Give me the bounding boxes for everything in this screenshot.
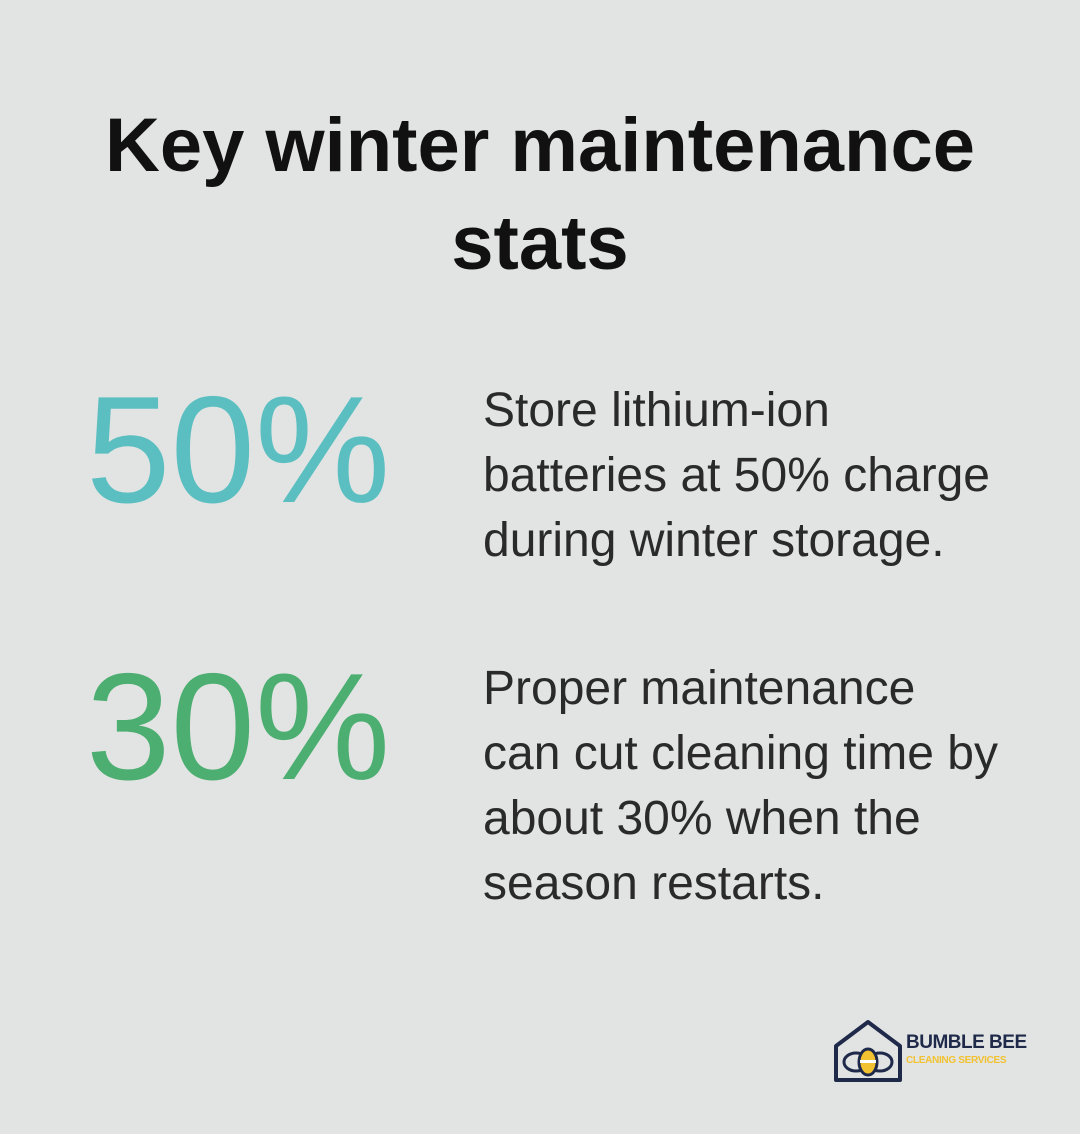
text: 50% description — [483, 384, 990, 567]
text: 30% description: Proper maintenance — [483, 662, 915, 715]
text: 50% description: during winter storage. — [483, 514, 945, 567]
text: 30% description: about 30% when the — [483, 792, 921, 845]
text: 50% description: batteries at 50% charge — [483, 449, 990, 502]
stat: 30%: 30% — [86, 642, 390, 812]
title: Key winter maintenance — [105, 103, 975, 188]
icon: bee house — [834, 1020, 902, 1082]
logo text: BUMBLE BEE — [906, 1032, 1027, 1053]
text: 50% description: Store lithium-ion — [483, 384, 830, 437]
logo: CLEANING SERVICES — [906, 1055, 1006, 1066]
text: 30% description — [483, 662, 998, 910]
text: 30% description: can cut cleaning time by — [483, 727, 998, 780]
title: stats — [451, 201, 629, 286]
stat: 50%: 50% — [86, 365, 390, 535]
logo — [834, 1020, 1027, 1082]
title — [105, 103, 975, 286]
text: 30% description: season restarts. — [483, 857, 824, 910]
